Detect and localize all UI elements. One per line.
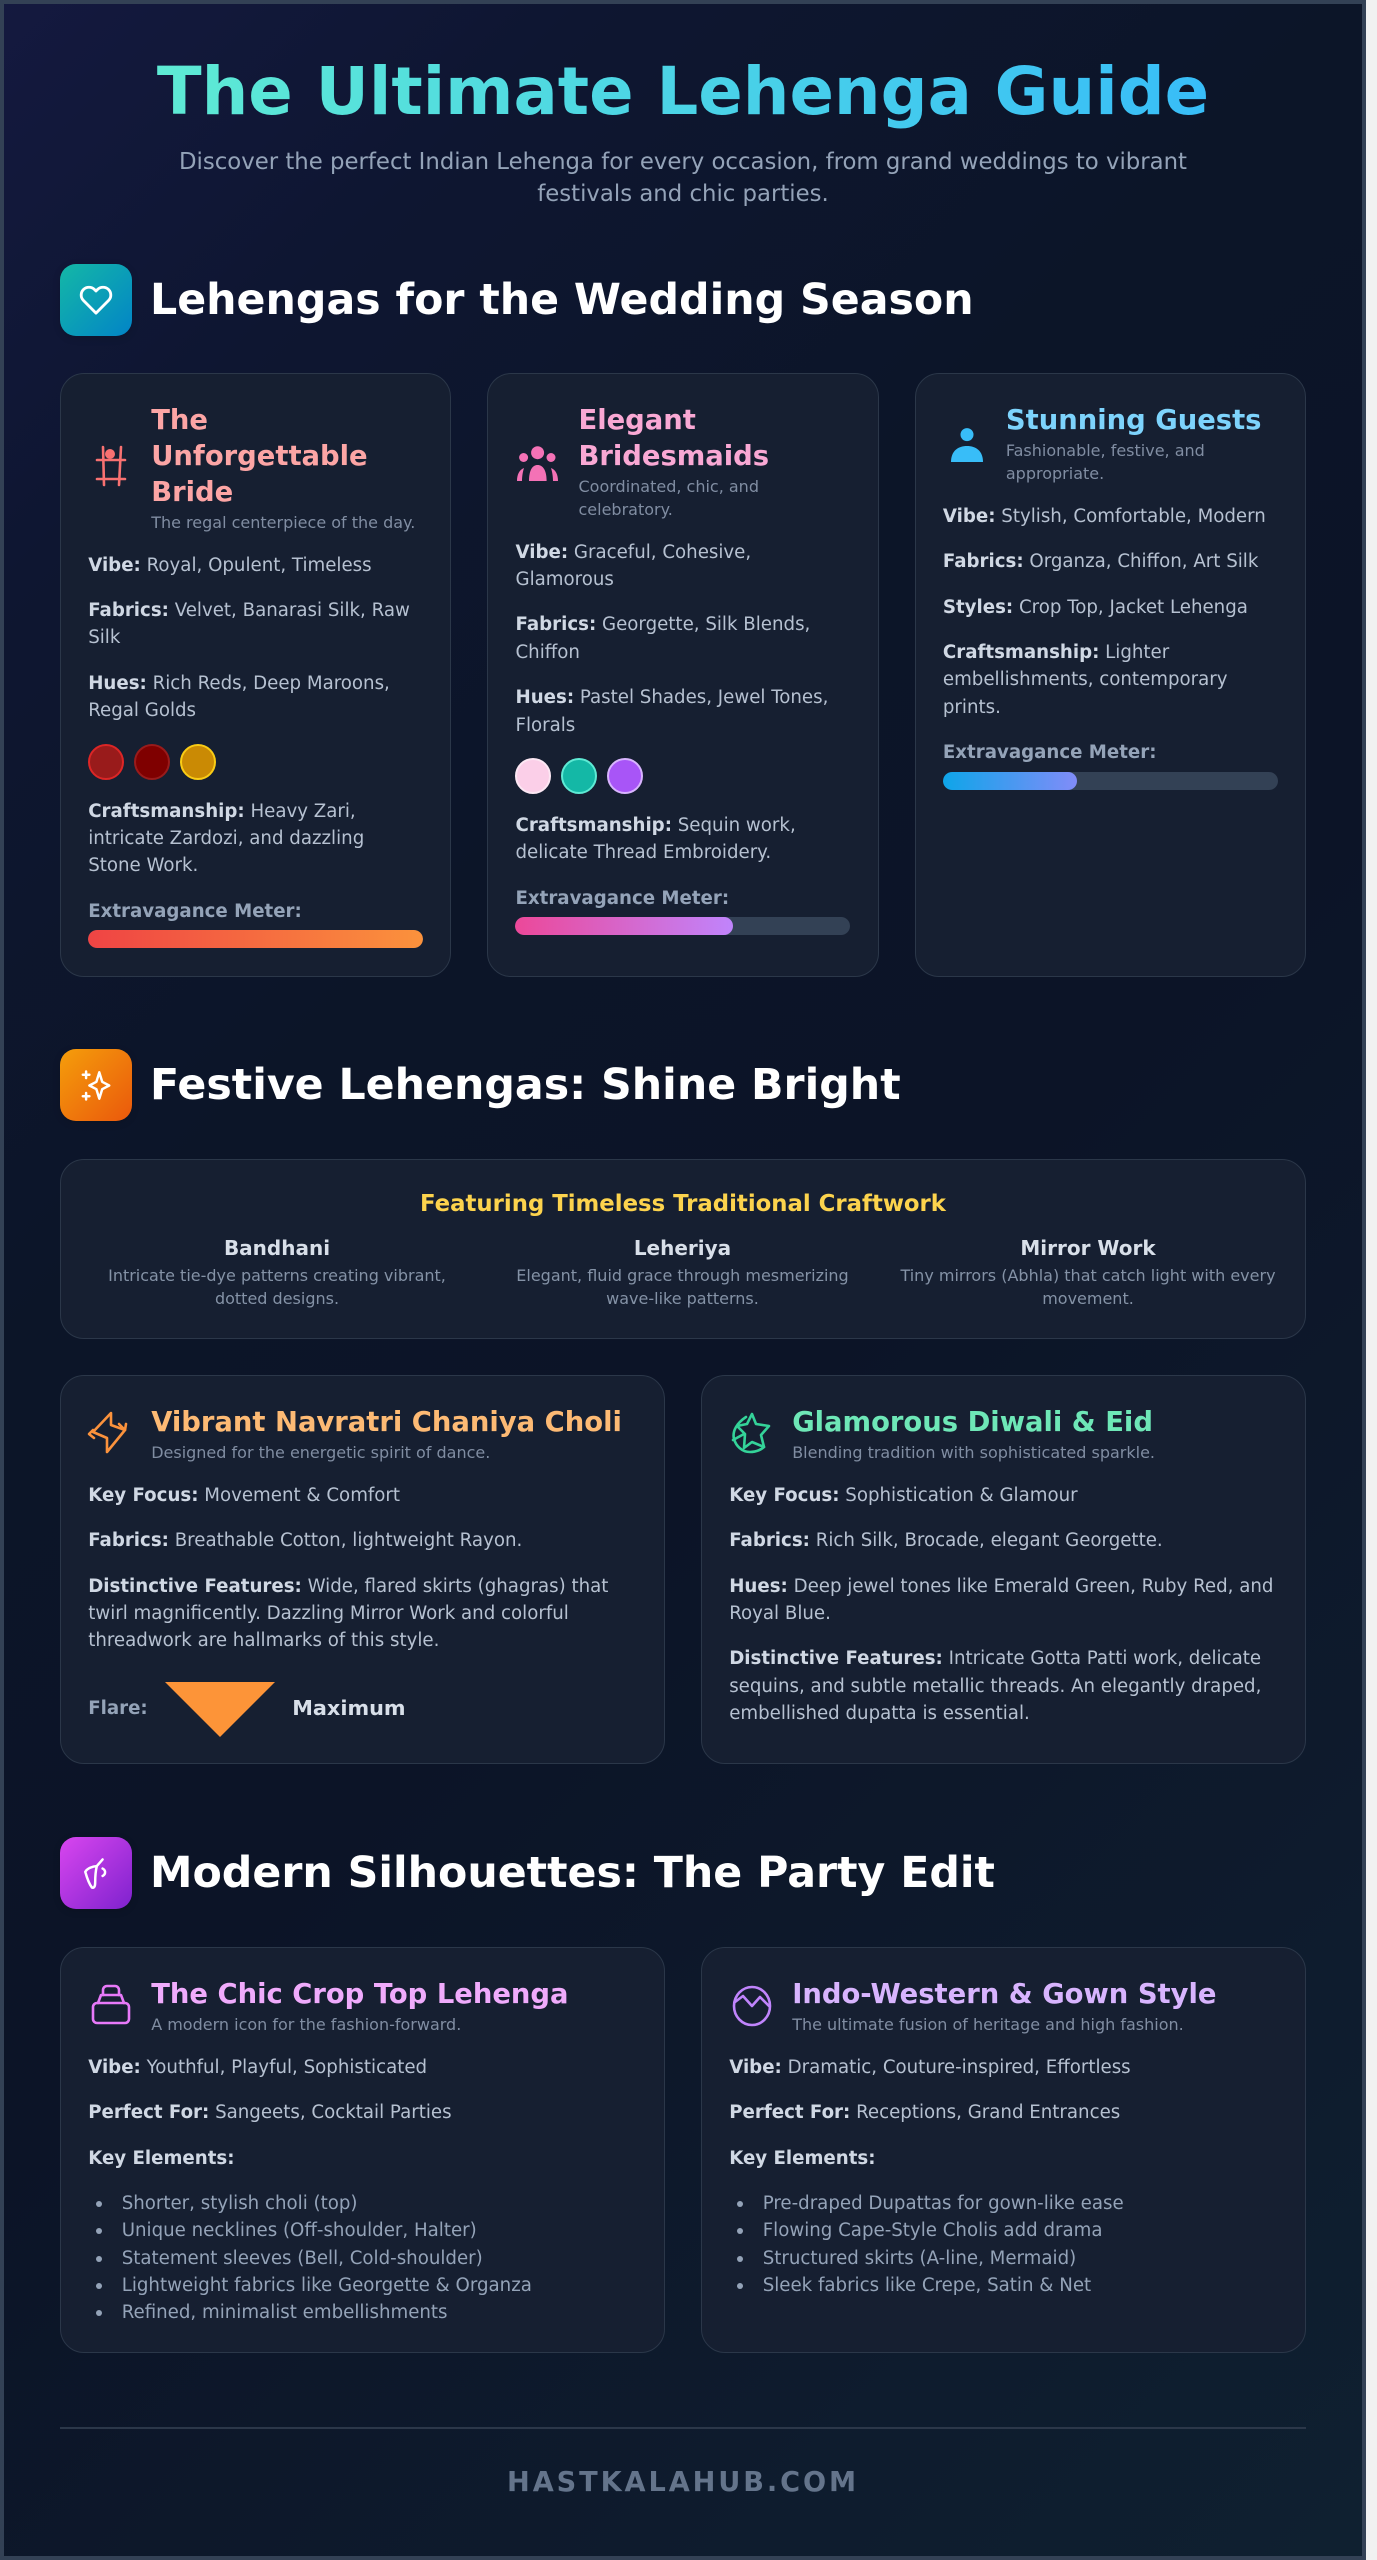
icon: person xyxy=(951,428,983,462)
panel: elegant bridesmaids xyxy=(487,373,879,977)
panel: the unforgettable bride xyxy=(60,373,451,977)
panel: elegant bridesmaids: Hues: Pastel Shades, Jewel Tones, Florals xyxy=(515,687,828,736)
card header: crop top: The Chic Crop Top Lehenga xyxy=(151,1979,569,2010)
list: key elements crop top: Shorter, stylish choli (top) xyxy=(122,2193,358,2214)
card header: bridesmaids: Elegant Bridesmaids xyxy=(578,405,769,472)
panel: the unforgettable bride: Craftsmanship: Heavy Zari, intricate Zardozi, and dazzling xyxy=(88,801,364,849)
icon: stacked crop top xyxy=(92,1984,130,2024)
panel: navratri chaniya choli xyxy=(60,1375,665,1764)
colour swatches: bridesmaids xyxy=(515,758,643,794)
panel: chic crop top lehenga xyxy=(60,1947,665,2353)
card header: bridesmaids: Coordinated, chic, and celebratory. xyxy=(578,477,759,519)
craft: mirror work xyxy=(900,1236,1276,1308)
icon: bride xyxy=(96,446,126,486)
icon: gown xyxy=(732,1986,772,2026)
panel: indo-western and gown style: Perfect For: Receptions, Grand Entrances xyxy=(729,2102,1120,2123)
panel: chic crop top lehenga: Perfect For: Sangeets, Cocktail Parties xyxy=(88,2102,452,2123)
panel: diwali and eid: Key Focus: Sophistication & Glamour xyxy=(729,1485,1078,1506)
panel: stunning guests: Craftsmanship: Lighter embellishments, contemporary prints. xyxy=(943,642,1228,718)
card header: guests: Fashionable, festive, and appropriate. xyxy=(1006,441,1205,483)
panel: diwali and eid: Fabrics: Rich Silk, Brocade, elegant Georgette. xyxy=(729,1530,1163,1551)
flare indicator: Flare: xyxy=(88,1698,148,1719)
flare indicator xyxy=(88,1682,406,1737)
icon: star xyxy=(732,1412,770,1454)
colour swatches: bride xyxy=(88,744,216,780)
panel: indo-western and gown style: Key Elements: xyxy=(729,2148,876,2169)
panel: navratri chaniya choli: Key Focus: Movement & Comfort xyxy=(88,1485,400,1506)
craftwork heading: Featuring Timeless Traditional Craftwork xyxy=(420,1191,946,1217)
meter: bride 100% xyxy=(88,930,423,948)
panel: diwali and eid: Distinctive Features: Intricate Gotta Patti work, delicate sequins, and subtle metallic threads. An elegantly draped, embellished dupatta is essential. xyxy=(729,1648,1261,1724)
list: key elements gown xyxy=(737,2193,1124,2296)
section heading: wedding season xyxy=(60,264,974,336)
panel: indo-western and gown style: Vibe: Dramatic, Couture-inspired, Effortless xyxy=(729,2057,1131,2078)
panel: stunning guests: Vibe: Stylish, Comfortable, Modern xyxy=(943,506,1266,527)
card header: bridesmaids xyxy=(517,405,769,519)
list: key elements crop top: Lightweight fabrics like Georgette & Organza xyxy=(122,2275,532,2296)
icon: silhouette xyxy=(60,1837,132,1909)
panel: elegant bridesmaids: Extravagance Meter: xyxy=(515,888,729,909)
panel: navratri chaniya choli: Distinctive Features: Wide, flared skirts (ghagras) that twirl magnificently. Dazzling Mirror Work and colorful threadwork are hallmarks of this style. xyxy=(88,1576,608,1651)
section heading: modern silhouettes xyxy=(60,1837,995,1909)
card header: diwali xyxy=(732,1407,1155,1462)
card header: crop top xyxy=(92,1979,569,2034)
card header: indo-western: Indo-Western & Gown Style xyxy=(792,1979,1216,2010)
panel: elegant bridesmaids: Fabrics: Georgette, Silk Blends, Chiffon xyxy=(515,614,810,663)
meter: guests 40% xyxy=(943,772,1278,790)
section heading: festive xyxy=(60,1049,901,1121)
panel: diwali and eid: Hues: Deep jewel tones like Emerald Green, Ruby Red, and Royal Blue. xyxy=(729,1576,1273,1624)
panel: the unforgettable bride: Hues: Rich Reds, Deep Maroons, Regal Golds xyxy=(88,673,390,721)
panel: stunning guests: Fabrics: Organza, Chiffon, Art Silk xyxy=(943,551,1258,572)
card header: indo-western xyxy=(732,1979,1216,2034)
list: key elements crop top: Unique necklines (Off-shoulder, Halter) xyxy=(122,2220,477,2241)
panel: indo-western and gown style xyxy=(701,1947,1306,2353)
icon: group xyxy=(517,446,558,481)
panel: traditional craftwork xyxy=(60,1159,1306,1338)
card header: indo-western: The ultimate fusion of heritage and high fashion. xyxy=(792,2015,1184,2034)
card header: crop top: A modern icon for the fashion-forward. xyxy=(151,2015,461,2034)
title: The Ultimate Lehenga Guide xyxy=(157,54,1209,130)
craft: leheriya: Leheriya xyxy=(634,1236,731,1260)
list: key elements gown: Flowing Cape-Style Cholis add drama xyxy=(763,2220,1102,2241)
card header: diwali: Blending tradition with sophisticated sparkle. xyxy=(792,1443,1155,1462)
card header: guests: Stunning Guests xyxy=(1006,405,1262,436)
list: key elements gown: Sleek fabrics like Crepe, Satin & Net xyxy=(763,2275,1091,2296)
section heading: modern silhouettes: Modern Silhouettes: The Party Edit xyxy=(150,1848,995,1898)
list: key elements gown: Pre-draped Dupattas for gown-like ease xyxy=(763,2193,1124,2214)
list: key elements crop top: Refined, minimalist embellishments xyxy=(122,2302,448,2323)
meter: bridesmaids 65% xyxy=(515,917,850,935)
list: key elements crop top: Statement sleeves (Bell, Cold-shoulder) xyxy=(122,2248,483,2269)
panel: the unforgettable bride: Extravagance Meter: xyxy=(88,901,302,922)
craft: bandhani: Bandhani xyxy=(224,1236,330,1260)
card header: bride: The regal centerpiece of the day. xyxy=(151,513,415,532)
craft: mirror work: Tiny mirrors (Abhla) that catch light with every movement. xyxy=(900,1266,1276,1308)
panel: stunning guests: Styles: Crop Top, Jacket Lehenga xyxy=(943,597,1248,618)
panel: chic crop top lehenga: Vibe: Youthful, Playful, Sophisticated xyxy=(88,2057,427,2078)
panel: navratri chaniya choli: Fabrics: Breathable Cotton, lightweight Rayon. xyxy=(88,1530,522,1551)
section heading: festive: Festive Lehengas: Shine Bright xyxy=(150,1060,901,1110)
panel: the unforgettable bride: Vibe: Royal, Opulent, Timeless xyxy=(88,555,372,576)
craft: bandhani xyxy=(108,1236,446,1308)
icon: zap xyxy=(88,1412,128,1454)
panel: elegant bridesmaids: Vibe: Graceful, Cohesive, Glamorous xyxy=(515,542,751,590)
flare indicator: Maximum xyxy=(292,1696,406,1720)
card header: bride: The Unforgettable Bride xyxy=(151,405,368,508)
icon: sparkles xyxy=(60,1049,132,1121)
craft: mirror work: Mirror Work xyxy=(1020,1236,1156,1260)
section heading: wedding season: Lehengas for the Wedding Season xyxy=(150,275,974,325)
panel: diwali and eid xyxy=(701,1375,1306,1764)
panel: the unforgettable bride: Stone Work. xyxy=(88,855,198,876)
craft: bandhani: Intricate tie-dye patterns creating vibrant, dotted designs. xyxy=(108,1266,446,1308)
card header: guests xyxy=(951,405,1262,483)
craft: leheriya xyxy=(516,1236,849,1308)
panel: chic crop top lehenga: Key Elements: xyxy=(88,2148,235,2169)
icon: heart xyxy=(60,264,132,336)
panel: elegant bridesmaids: Craftsmanship: Sequin work, delicate Thread Embroidery. xyxy=(515,815,796,863)
craft: leheriya: Elegant, fluid grace through mesmerizing wave-like patterns. xyxy=(516,1266,849,1308)
card header: navratri: Designed for the energetic spirit of dance. xyxy=(151,1443,490,1462)
panel: stunning guests: Extravagance Meter: xyxy=(943,742,1156,763)
list: key elements gown: Structured skirts (A-line, Mermaid) xyxy=(763,2248,1076,2269)
card header: bride xyxy=(96,405,415,532)
list: key elements crop top xyxy=(96,2193,532,2323)
footer brand: HASTKALAHUB.COM xyxy=(507,2467,859,2498)
card header: navratri: Vibrant Navratri Chaniya Choli xyxy=(151,1407,622,1438)
panel: stunning guests xyxy=(915,373,1306,977)
subtitle: Discover the perfect Indian Lehenga for every occasion, from grand weddings to vibrant festivals and chic parties. xyxy=(179,149,1187,207)
panel: the unforgettable bride: Fabrics: Velvet, Banarasi Silk, Raw Silk xyxy=(88,600,410,648)
card header: diwali: Glamorous Diwali & Eid xyxy=(792,1407,1153,1438)
card header: navratri xyxy=(88,1407,622,1462)
